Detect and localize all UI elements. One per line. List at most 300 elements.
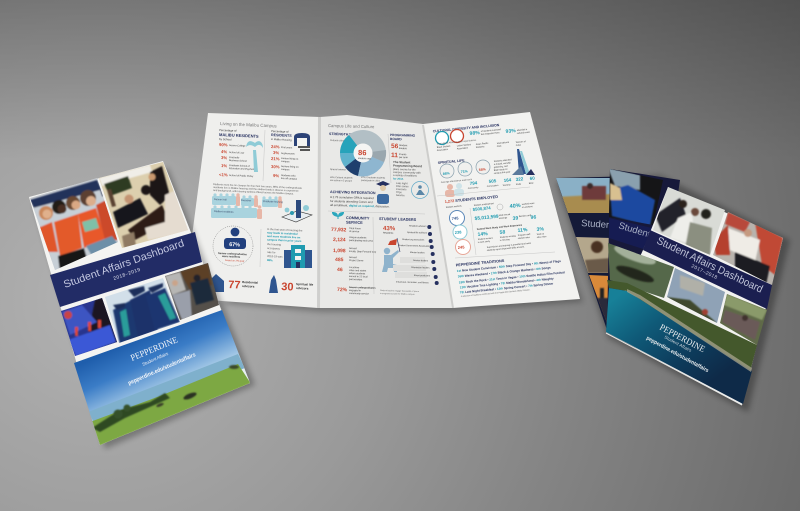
list: student leader roles: Student Government Association [398,244,431,248]
heading: students employed: 1,272 STUDENTS EMPLOYED [445,195,498,204]
stats: attendance numbers [441,175,535,190]
text: donut notes [330,139,386,183]
stat: 30 spiritual life advisors: 30 [281,281,294,294]
divider [328,211,425,214]
stats: employment totals: total annual [499,213,511,217]
programming board stats: 56 [391,143,399,150]
panel: Campus Life and Culture [328,123,439,296]
icon: chapel spires [512,149,535,175]
stats: spiritual circles: 71% [461,169,469,174]
stat: 77 residential advisors: 77 [228,279,241,292]
percentage of residents: Students who [281,174,296,178]
shadow [556,175,790,412]
heading: community service [346,216,370,225]
percentage of residents: campus [281,168,290,171]
stat: 30 spiritual life advisors: Spiritual life [296,282,314,287]
programming board stats: PROGRAMMING [390,133,416,138]
percentage of residents: in Malibu Housing [271,137,292,142]
list: community service numbers: Seaver undergraduates [349,286,376,290]
list: community service numbers: 77,932 [331,227,347,233]
icon: leader with flag [382,238,427,278]
list: traditions: 36th Waves Weekend • 17th Black & Orange Madness • 8th Songs [458,266,551,278]
divider [470,208,476,255]
list: community service numbers: 1,098 [333,248,346,254]
text: student programming board: Film series [396,184,409,188]
text: spiritual life note: Bible study on [494,168,508,172]
callout: 67% undergraduates circle: Seaver undergraduates [218,251,248,256]
divider [455,252,555,258]
list: community service numbers: 72% [337,287,348,293]
callout: 67% undergraduates circle [213,226,253,266]
date: 2017-2018: 2017–2018 [690,263,718,281]
text: achieving integration: A 2.75 cumulative GPA is required [330,195,374,200]
logo subtitle: Student Affairs: Student Affairs [141,351,170,367]
list: cultural programs: Color [516,143,521,147]
brochure B (middle) [608,169,680,307]
heading: spiritual life: SPIRITUAL LIFE [438,158,466,165]
photo: beach group [556,178,610,213]
heading: strength in diversity: STRENGTH IN DIVERSITY [329,132,373,137]
photo: ocean landscape [74,310,250,445]
stats: attendance numbers: Worship [503,183,511,187]
icon: graduate [376,181,390,204]
list: cultural programs: Students [476,145,485,149]
photo: coastline [606,280,757,405]
brochure A (back) [556,176,610,328]
percentage of malibu residents [219,128,259,178]
stats: employment totals: Seniors and [519,214,532,218]
list: community service numbers: cities and states [349,269,367,272]
text: residence paragraph: the housing [267,242,282,247]
icon: community sprout [332,212,344,219]
list: community service numbers: Served [349,256,357,259]
stats: federal work study: 11% [517,227,528,234]
panel: Living on the Malibu Campus [209,121,314,294]
stats: federal work study: in Housing [500,239,511,242]
heading: pepperdine traditions: PEPPERDINE TRADITIONS [456,259,505,268]
percentage of malibu residents: 1% [221,163,228,168]
text: student programming board: Programming Board [393,164,422,168]
icon: diversity rings [436,130,464,144]
list: student leader roles: Intramural, recreation, and fitness [396,281,430,284]
stats: diversity percentages: cultural event [517,131,530,135]
callout: 67% undergraduates circle: were residents [222,254,241,259]
text: residence paragraph: occupancy [267,247,281,251]
stats: diversity percentages: of students surveyed [481,128,502,133]
list: community service numbers: Project Serve [349,259,364,262]
percentage of malibu residents: School of Law [229,151,244,155]
list: student leader roles: Student org executives [402,238,425,242]
sheet: right panel [423,112,580,308]
text: achieving integration: all enrollment, digital as required, discussion. [330,203,390,209]
stats: diversity percentages: attended a [517,128,528,132]
stats: employment totals: $5,013,599 [474,214,499,222]
cover sheet [29,161,250,445]
brochure C (front) [606,185,788,405]
band B [609,218,652,249]
panel: stacked brochures [550,165,790,412]
icon: dorm arch [294,133,310,151]
stats: diversity percentages: 98% [469,130,481,137]
divider [260,229,261,267]
banner: title band [643,230,772,309]
callout: 67% undergraduates circle: 67% [229,242,240,248]
percentage of malibu residents: School of Public Policy [229,174,254,178]
list: community service numbers: Total hours [349,227,362,230]
list: student leader roles: Orientation leaders [411,266,430,270]
icon: house [209,274,224,292]
stats: employment totals: worked more [522,202,535,206]
list: cultural programs: Intercultural Affairs student organizations [437,139,477,146]
list: student leader roles [396,225,431,284]
stats: attendance numbers: 164 [504,177,512,183]
text: donut notes: 42% Graduate students [361,176,386,180]
photo: flag and students [667,268,725,323]
stats: employee circles [446,204,470,254]
text: student programming board [393,160,422,197]
percentage of malibu residents: Graduate School of [229,164,250,168]
text: spiritual life note [494,158,512,175]
stats: employment totals: 40% [509,203,521,210]
text: spiritual life note: a chapel, worship [494,161,512,166]
logo: PEPPERDINE: PEPPERDINE [658,322,707,354]
heading: Campus Life and Culture [328,123,375,129]
chart: diversity donut [340,130,386,176]
list: student leader roles: Event producers [414,274,431,277]
stats: spiritual circles [440,160,490,178]
list: community service numbers: locally, Step Forward Day [349,250,377,254]
stats: federal work study: 14% [477,231,489,238]
stats: employment totals: Student employment [474,202,494,207]
stats: federal work study: in work study [478,240,491,244]
list: traditions: 18th Rock the Rock • 21st Town in Vegas • 10th Seattle Indian Film Festival [459,270,565,284]
text: residence paragraph: In the first year of housing the [267,227,303,233]
percentage of malibu residents: Seaver College [229,144,246,148]
list: cultural programs: Association [437,148,449,152]
text: student programming board: campus community with [393,170,421,175]
percentage of malibu residents: by School [219,137,232,142]
text: occupancy paragraph [213,183,303,196]
percentage of malibu residents: 3% [221,155,228,160]
list: community service numbers: served in 21 local [349,275,368,278]
text: donut notes: participate in clubs [361,179,381,183]
photo: blue gowns [609,169,663,225]
stat: 30 spiritual life advisors [281,281,314,294]
stats: employment totals: $500,874 [473,205,491,212]
text: spiritual life note: campus this year [494,170,511,175]
list: cultural programs: Association [457,146,469,150]
panel: 2018-2019 cover brochure [20,155,260,452]
programming board stats: BOARD [390,137,402,141]
icon: people rows: Student residents [214,210,234,214]
list: community service numbers: community service [349,292,370,296]
list: community service numbers: engaged in [349,289,362,292]
text: student programming board: The Student [393,160,410,164]
photo: graduates [105,278,180,343]
stats: federal work study [477,224,547,252]
text: donut notes: 48% Cultural students [330,176,353,180]
icon: programming board circle [412,182,428,198]
text: student programming board: a variety of traditions [393,173,418,178]
list: student leader roles: Resident advisors [409,225,427,228]
fold shadows [317,117,321,308]
percentage of residents: campus [281,160,290,163]
stats: attendance numbers: Bible [529,182,534,185]
stats: diversity percentages: 93% [505,128,517,135]
text: student programming board: Concerts [396,187,407,191]
chart: diversity donut: 86 [358,148,367,157]
photo: red tent [61,298,117,356]
text: residence paragraph: 88%. [267,258,274,262]
banner text: Student: Student [581,218,615,231]
list: community service numbers: Unique students [349,236,367,239]
stats: employee circles: 245 [458,244,465,250]
stats: diversity percentages [469,128,530,137]
stats: diversity percentages: feel respected here [481,131,500,136]
text: student programming board: Late night [396,181,408,185]
banner: title band [50,232,202,307]
percentage of malibu residents: 4% [221,149,228,154]
footnote: in programs across the Malibu campus. [380,292,415,296]
heading: student leaders: STUDENT LEADERS [379,217,417,222]
text: student programming board: for 2018. [393,177,404,181]
list: community service numbers: Locations [349,266,360,269]
text: achieving integration [330,195,390,209]
list: cultural programs: Asian Pacific [476,142,489,146]
photo: students in orange [30,178,118,270]
stats: federal work study: 58 [499,229,506,236]
heading: diversity and inclusion: CULTURAL DIVERSITY AND INCLUSION [433,123,500,134]
list: student leader roles: Service leaders [413,259,429,262]
text: student programming board: Trips [396,190,402,194]
icon: people rows: Seaver hall [214,198,227,202]
list: student leader roles: Spiritual life advisors [407,231,428,235]
icon: palm tree [246,141,263,172]
title: Student Affairs Dashboard: Student Affairs Dashboard [655,235,765,296]
footnote: A selection of traditions continued with the Pepperdine Student Affairs Division. [461,288,531,298]
stats: federal work study: Program staff [518,233,531,237]
text: residence paragraph: rate for [267,250,276,254]
percentage of malibu residents: <1% [219,172,228,177]
list: traditions: 1st New Student Convivium • 50th Step Forward Day • 9th Waves of Flags [457,259,561,273]
stat: 77 residential advisors [228,279,258,292]
text: achieving integration: for students attending Convo and [330,199,373,204]
stats: attendance numbers: Study [516,182,522,186]
photo: students in red [713,212,783,285]
percentage of residents: First years [281,146,293,150]
stats: attendance numbers: 322 [516,176,524,182]
text: student programming board: plans events for the [393,167,416,172]
footnote [380,289,419,296]
percentage of residents: live off campus [281,177,298,181]
date: 2018-2019: 2018–2019 [113,267,141,282]
stats: federal work study: other sites [537,235,547,239]
title: Student Affairs Dashboard: Student Affairs Dashboard [62,237,186,291]
text: student programming board: Service [396,193,405,197]
photo: sunset [589,275,608,323]
list: traditions: 7th Late Night Breakfast • 13th Spring Concert • 7th Spring Dinner [460,281,554,294]
stats: attendance numbers: Average attendance each term [441,178,472,184]
heading: achieving integration: ACHIEVING INTEGRATION [330,190,376,195]
list: cultural programs: Women of [516,141,526,144]
sheet: center panel [318,115,453,308]
list: cultural programs: Latino Student [457,143,471,148]
list: cultural programs: Club [497,146,502,148]
text: donut notes: Special interest [330,168,346,171]
percentage of residents: RESIDENTS [271,133,292,138]
percentage of residents: 24% [271,144,280,149]
list: traditions: 13th Vocalize Tree Lighting • 7th Malibu Wonderland • 4th Naughty [460,276,554,290]
divider [388,134,391,183]
stats: employment totals [473,202,537,222]
list: community service numbers: Served [349,247,357,250]
heading: Living on the Malibu Campus [220,121,278,129]
programming board stats [390,133,416,159]
stats: federal work study: 3% [536,226,545,233]
divider [437,187,530,196]
list: community service numbers: of service [349,230,360,233]
heading: community service: COMMUNITY [346,216,370,221]
list: student leader roles: Mentor leaders [410,251,426,254]
stats: attendance numbers: 794 [470,180,478,186]
stats: employee circles: Student workers [446,204,463,209]
stats: spiritual circles: 55% [479,167,487,172]
programming board stats: leaders [399,147,408,150]
stats: federal work study: student roles [518,236,530,240]
text: spiritual life note: gathering, and [494,165,509,169]
photo: friends on grass [720,294,767,345]
text: residence paragraph: campus than in prior years [267,238,302,243]
list: cultural programs [437,139,526,152]
percentage of malibu residents: Education and Psychology [229,167,258,171]
list: traditions [457,259,565,294]
percentage of malibu residents: Business School [229,159,247,163]
stats: federal work study: Federal Work Study and Work Experience [477,224,523,231]
stats: attendance numbers: Community [468,186,479,190]
text: donut notes: Cultural clubs [330,139,345,142]
photo: trees [608,242,674,298]
stats: employee circles: 745 [452,215,459,221]
percentage of residents: 9% [273,173,280,178]
list: community service numbers: 2,124 [333,237,346,243]
list: community service numbers: 46 [337,267,343,273]
text: donut notes: are active in 5 groups [330,179,353,183]
divider [263,130,265,181]
icon: tower [269,275,278,293]
photo: group at table [165,263,219,320]
percentage of residents: 30% [271,164,280,169]
sheet: left panel [184,113,320,308]
text: residence paragraph: stay leads to residential [267,231,298,236]
stats: attendance numbers: Convocation [487,184,499,188]
stats: spiritual circles: 86% [443,171,451,176]
stats: employment totals: 96 [530,214,537,221]
stats: employee circles: 238 [455,229,462,235]
photo: three friends [653,187,725,255]
stats: federal work study: Work at [537,232,545,236]
stat: 77 residential advisors: advisors [242,284,255,289]
text: spiritual life note: Students attended [494,158,512,163]
percentage of residents: Sophomores [281,152,295,156]
text: occupancy paragraph: and background, with housing options offered across the Malibu campus. [213,189,294,196]
percentage of malibu residents: Graziadio [229,156,240,159]
percentage of residents: 21% [271,156,280,161]
icon: people rows: Drescher [241,199,251,202]
percentage of residents: Seniors living on [281,165,299,169]
panel: open brochure spread [184,112,583,312]
stat: 43%: Residents [383,232,394,235]
shadow under open brochure [220,240,583,312]
programming board stats: per term [399,156,408,159]
stat: 43%: 43% [383,226,396,232]
list: cultural programs: International [497,141,509,145]
photo: man portrait [576,237,609,273]
url: pepperdine.edu/studentaffairs: pepperdine.edu/studentaffairs [645,335,709,374]
icon: attendance people [445,183,464,197]
programming board stats: Student [399,144,408,147]
programming board stats: 11 [391,152,398,159]
stats: federal work study: Supervision and training is provided and most [487,242,531,249]
callout: 67% undergraduates circle: based on 2% goal [225,259,245,263]
text: residence paragraph: and more students live on [267,234,301,239]
text: residence paragraph: 2018-19 was [267,254,283,259]
banner text: Student: Student [617,220,652,241]
list: community service numbers: 485 [335,257,344,263]
stat: 30 spiritual life advisors: advisors [296,286,309,291]
percentage of malibu residents: MALIBU RESIDENTS [219,132,259,139]
icon: campus tower map [282,200,312,222]
stats: attendance numbers: 60 [530,175,535,181]
icon: role badges [427,225,439,285]
programming board stats: Events [399,153,407,156]
list: community service numbers: partnerships [349,278,363,281]
stats: federal work study: Student workers [478,237,493,241]
footnote: Student leaders engage thousands of peers [380,289,419,293]
stats: federal work study: students report improved skills at work. [487,245,525,252]
percentage of residents: 3% [273,150,280,155]
list: community service numbers: where students [349,272,366,275]
stat: 77 residential advisors: Residential [242,280,258,285]
icon: residence buildings [284,245,312,268]
stats: attendance numbers: 505 [489,178,497,184]
icon: people rows: Graduate housing [263,200,284,204]
stats: employment totals: on-campus [522,206,534,209]
stat: 43% [383,226,396,235]
percentage of residents: Juniors living on [281,157,299,161]
percentage of malibu residents: 90% [219,142,228,147]
stats: federal work study: Students working [500,234,517,239]
text: occupancy paragraph: residents live in Malibu housing and the student body is diverse in experience [213,186,299,193]
url: pepperdine.edu/studentaffairs: pepperdine.edu/studentaffairs [127,352,197,387]
list: cultural programs: Black Student [437,145,451,149]
text: occupancy paragraph: Students must live on campus for their first two years, 89% of the undergraduate [213,183,303,190]
list: community service numbers [331,227,377,296]
text: residence paragraph [267,227,303,262]
divider [373,217,374,294]
shadow [34,168,255,449]
photo: guitar students [99,162,188,248]
icon: people rows [211,193,284,219]
percentage of residents: Percentage of [271,129,289,134]
chart: diversity donut: student orgs [358,157,372,160]
percentage of malibu residents: Percentage of [219,128,237,133]
list: community service numbers: participating each year [349,239,373,243]
percentage of residents [271,129,299,181]
heading: community service: SERVICE [346,221,363,225]
panel: cultural diversity, spiritual life, employment, traditions [433,123,565,298]
stats: employment totals: 39 [512,215,519,222]
stats: employment totals: earnings [499,216,508,220]
